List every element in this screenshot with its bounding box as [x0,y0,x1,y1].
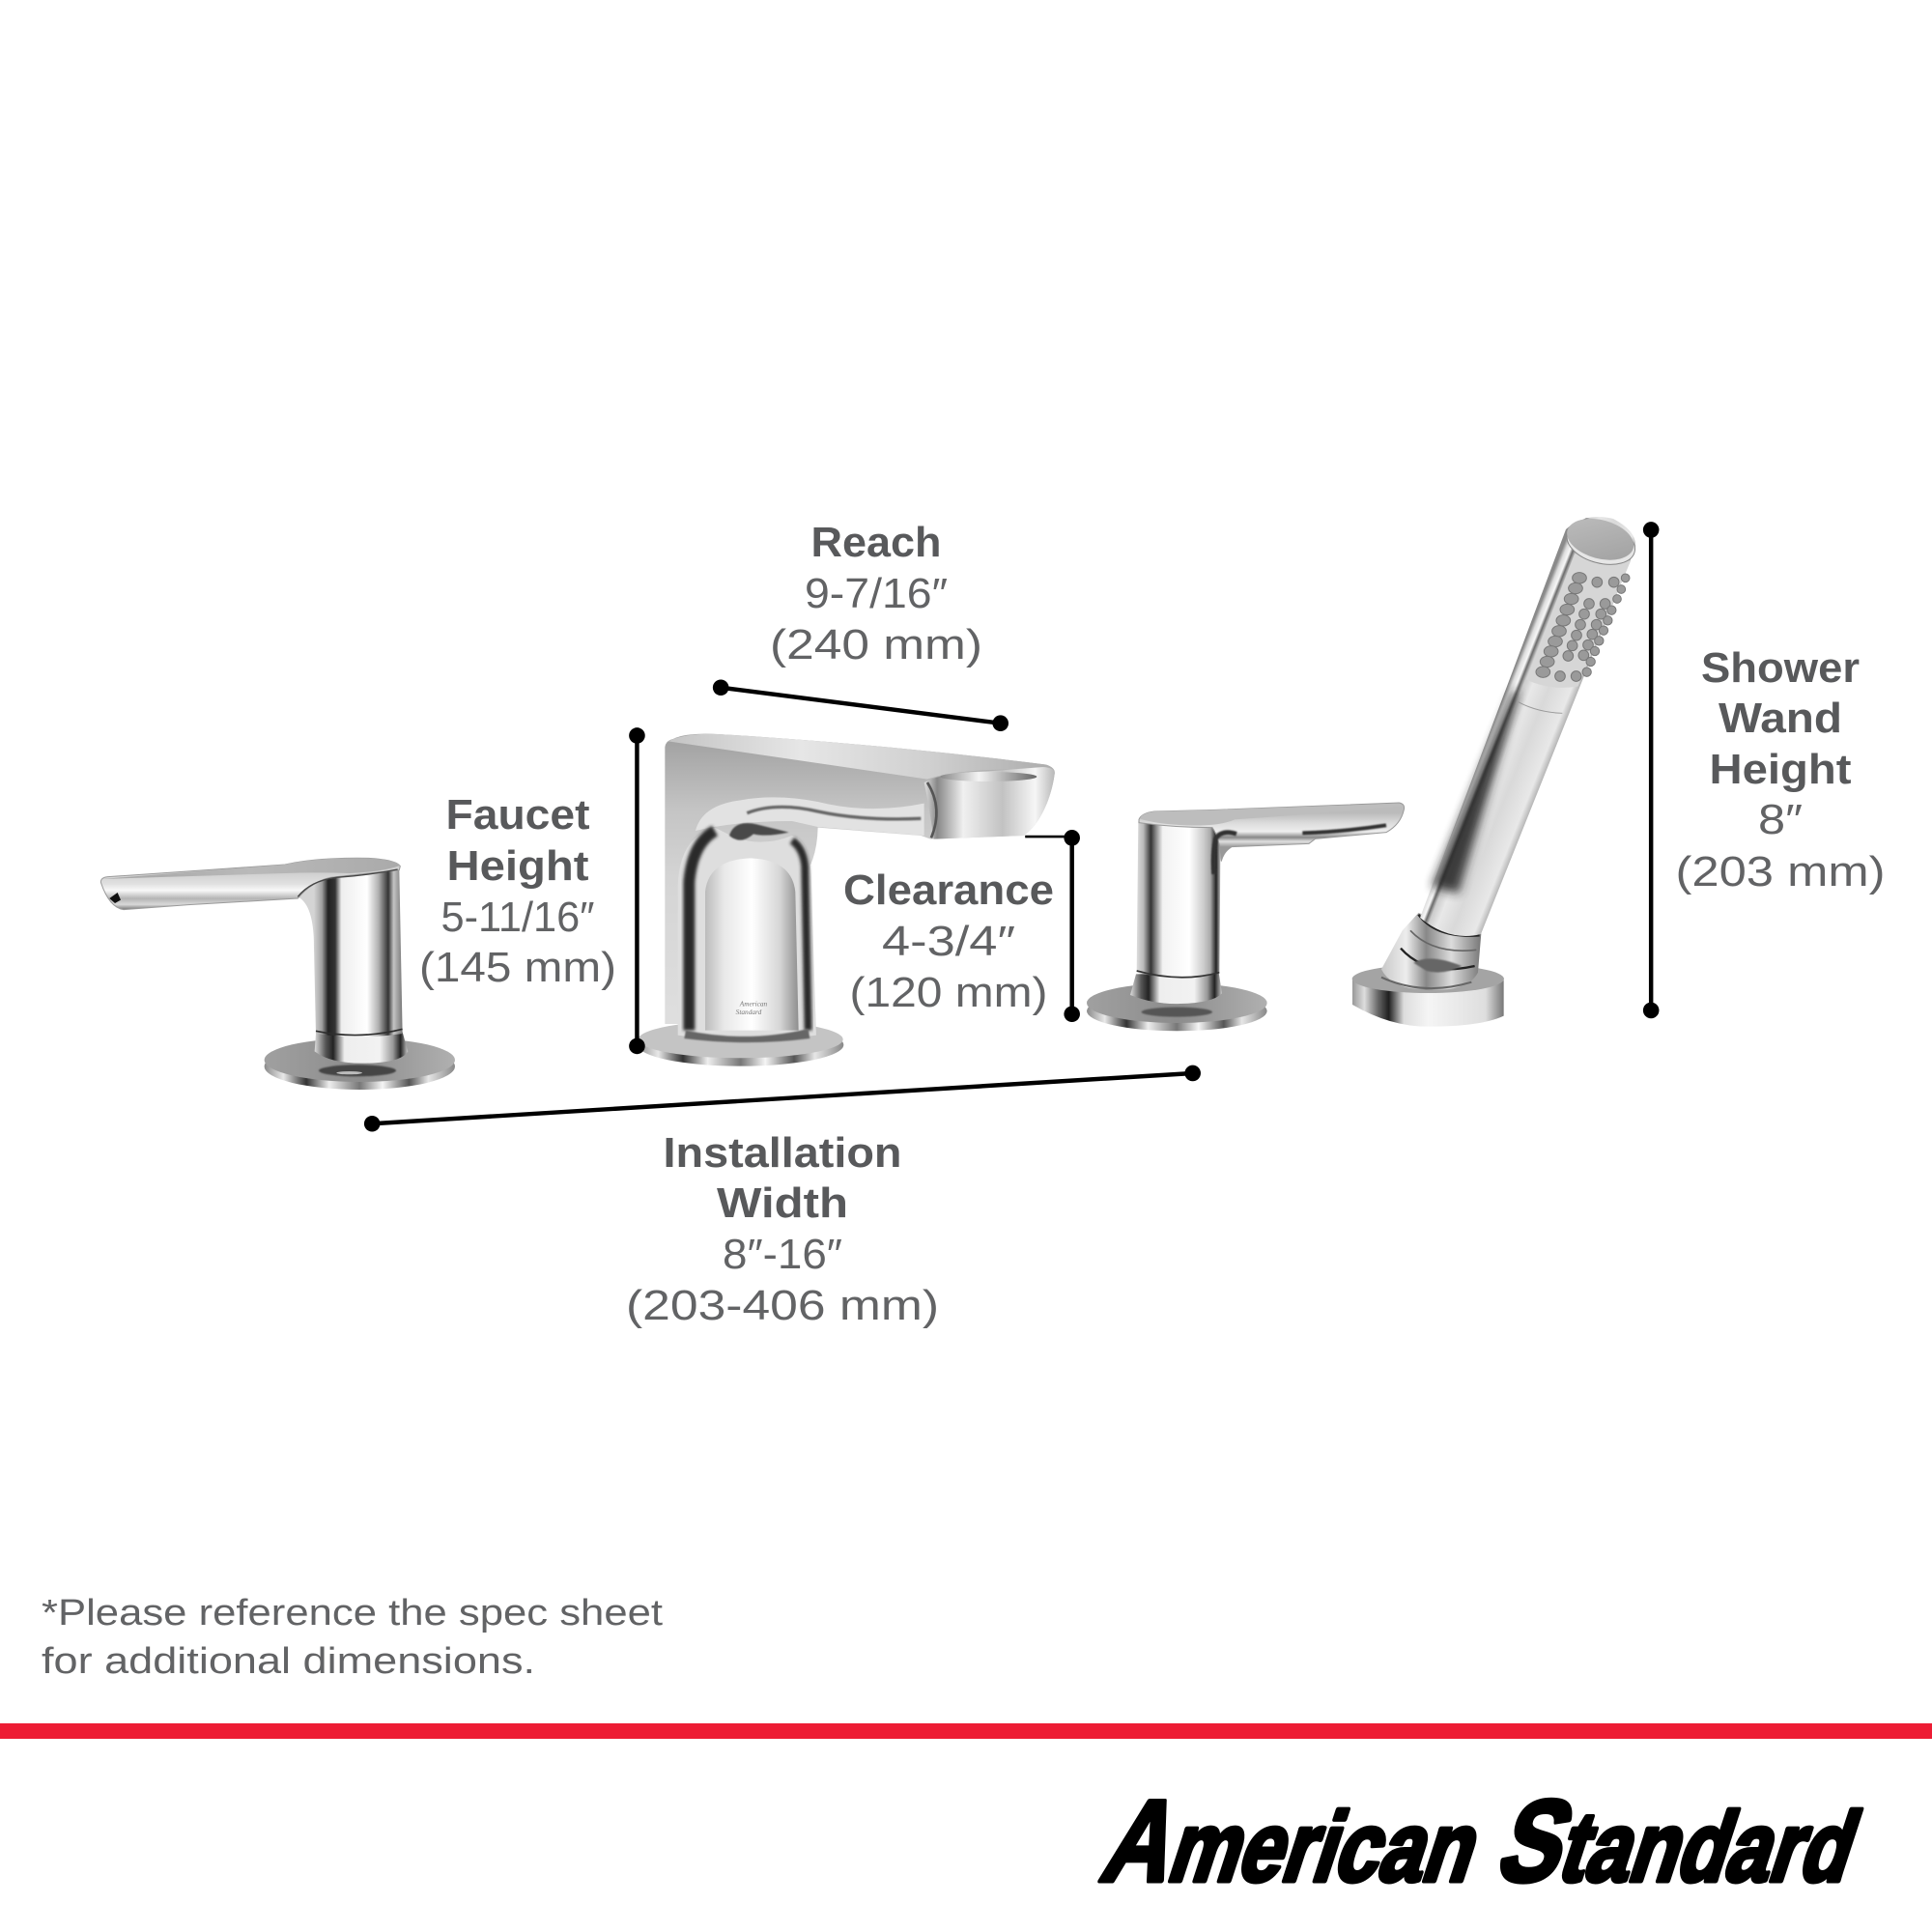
label: clearance [843,867,1054,1016]
spout arm dark streak [747,807,921,819]
wand head seams [1519,702,1562,713]
reach dimension line [713,679,1009,731]
left handle [100,858,455,1090]
label: faucet height: Faucet [446,791,590,838]
label: reach [770,519,982,668]
right handle [1087,803,1405,1031]
label: installation width: (203-406 mm) [626,1282,939,1329]
right lever dark streak [1302,825,1386,833]
spout lower band [684,1029,810,1042]
wand end cap rim [1562,515,1639,572]
label: reach: 9-7/16″ [805,570,948,617]
shower wand [1352,512,1639,1027]
left handle collar line [316,1029,403,1036]
right handle column [1137,821,1241,978]
footnote: for additional dimensions. [42,1641,535,1682]
label: reach: (240 mm) [770,621,982,668]
label: faucet height: Height [446,842,589,890]
label: installation width [626,1129,939,1329]
label: clearance: Clearance [843,867,1054,914]
label: clearance: 4-3/4″ [882,918,1015,965]
left handle lever [100,858,400,910]
label: faucet height: (145 mm) [419,944,616,991]
label: shower wand height [1675,644,1886,895]
label: clearance: (120 mm) [850,969,1047,1016]
wand spray face [1526,554,1631,688]
footnote: *Please reference the spec sheet [42,1593,664,1634]
wand spray nozzles [1536,573,1630,681]
right handle elbow [1213,833,1236,874]
spout top ridge [668,734,1046,780]
red divider bar [0,1723,1932,1739]
spout dark arch right [792,840,809,1031]
label: shower wand height: (203 mm) [1675,848,1886,895]
wand head [1519,512,1639,713]
label: faucet height [419,791,616,991]
label: installation width: Width [717,1179,848,1227]
spout dark arch left [689,831,715,1031]
label: shower wand height: Height [1710,746,1852,793]
left handle lever tip [109,893,121,903]
label: installation width: 8″-16″ [723,1231,842,1278]
label: shower wand height: Wand [1719,695,1842,742]
small brand mark on column: American [739,1000,768,1009]
wand end cap [1562,512,1638,567]
wand handle [1420,517,1635,936]
clearance dimension line [1025,830,1080,1022]
label: faucet height: 5-11/16″ [440,894,595,941]
left handle base plate [265,1038,455,1090]
wand puck base [1352,965,1504,1027]
spout column [678,828,816,1040]
faucet height dimension line [629,727,645,1054]
small brand mark on column: Standard [736,1008,762,1016]
spout silhouette plate [665,734,1055,1024]
wand neck swivel [1381,913,1481,990]
left handle column [298,869,403,1037]
shower wand height dimension line [1643,522,1659,1018]
right handle collar [1130,973,1222,1004]
right handle collar line [1137,971,1219,978]
installation width dimension line [364,1065,1201,1132]
wand handle dark streak [1432,691,1519,894]
label: shower wand height: Shower [1701,644,1860,692]
spout arm [696,797,924,836]
spout elbow swirl [729,823,789,840]
spout column inner panel [705,858,799,1031]
left handle collar [315,1032,408,1064]
center spout faucet [638,734,1055,1066]
right handle lever [1139,803,1405,862]
label: installation width: Installation [663,1129,902,1177]
brand logo: American Standard [1090,1776,1878,1906]
spout base [638,1021,843,1066]
left handle elbow seam [298,869,398,896]
left handle lever top face [101,858,400,879]
spout nozzle [924,767,1055,839]
label: shower wand height: 8″ [1758,796,1803,843]
footnote [42,1593,664,1682]
label: reach: Reach [811,519,941,566]
right handle base [1087,983,1267,1031]
dimension lines [364,522,1659,1132]
right handle top face [1140,804,1403,826]
